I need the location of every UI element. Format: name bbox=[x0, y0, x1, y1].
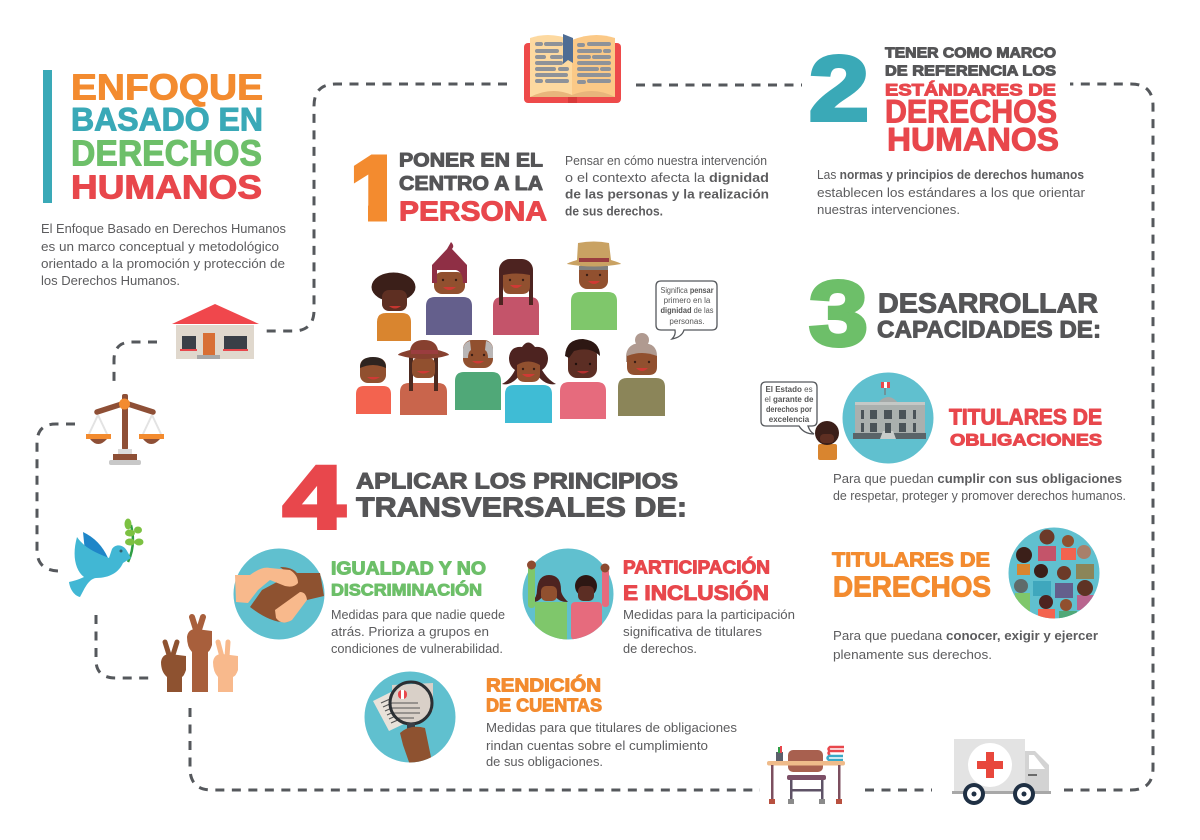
section 2: description: establecen los estándares a los que orientar bbox=[817, 185, 1086, 200]
heading: rendición de cuentas bbox=[486, 674, 602, 716]
section 4: heading bbox=[356, 468, 687, 522]
description: participación e inclusión: significativa de titulares bbox=[623, 624, 763, 639]
description: rendición de cuentas: rindan cuentas sobre el cumplimiento bbox=[486, 738, 708, 753]
section 1: heading bbox=[399, 150, 547, 226]
description: titulares de obligaciones bbox=[833, 471, 1126, 503]
icon: school desk and chair bbox=[767, 746, 845, 804]
description: rendición de cuentas: de sus obligaciones. bbox=[486, 754, 603, 769]
speech bubble: significa pensar bbox=[656, 281, 717, 339]
section 2: heading: TENER COMO MARCO bbox=[885, 44, 1056, 62]
section 3: heading: DESARROLLAR bbox=[878, 288, 1098, 318]
icon: scales of justice bbox=[86, 394, 164, 465]
section 4: heading: APLICAR LOS PRINCIPIOS bbox=[356, 468, 678, 494]
description: titulares de obligaciones: de respetar, proteger y promover derechos humanos. bbox=[833, 488, 1126, 503]
speech bubble: el Estado: excelencia bbox=[769, 415, 810, 424]
title block: ENFOQUE bbox=[71, 66, 263, 108]
person: small orange figure bbox=[815, 421, 839, 460]
speech bubble: significa pensar: dignidad de las bbox=[660, 306, 714, 315]
description: igualdad y no discriminación bbox=[331, 607, 505, 656]
group of people bbox=[356, 242, 665, 423]
title block: HUMANOS bbox=[71, 168, 262, 206]
section 1: description: de las personas y la realización bbox=[565, 186, 769, 202]
person: terracotta shirt with brown hat bbox=[398, 340, 449, 415]
speech bubble: el Estado: El Estado es bbox=[765, 385, 813, 394]
section 2: description: nuestras intervenciones. bbox=[817, 202, 960, 217]
heading: participación e inclusión: PARTICIPACIÓN bbox=[623, 556, 770, 578]
icon: dove with olive branch bbox=[69, 518, 144, 597]
icon: accountability magnifier in circle bbox=[364, 672, 456, 765]
title block: DERECHOS bbox=[71, 132, 262, 174]
description: titulares de obligaciones: Para que puedan cumplir con sus obligaciones bbox=[833, 471, 1122, 486]
icon: government palace in circle bbox=[842, 372, 934, 464]
intro paragraph: orientado a la promoción y protección de bbox=[41, 256, 285, 271]
person: pink shirt dark skin bbox=[560, 339, 606, 419]
section 1: description bbox=[565, 153, 769, 218]
description: rendición de cuentas: Medidas para que titulares de obligaciones bbox=[486, 720, 737, 735]
description: participación e inclusión: de derechos. bbox=[623, 641, 697, 656]
description: igualdad y no discriminación: condiciones de vulnerabilidad. bbox=[331, 641, 503, 656]
heading: titulares de obligaciones bbox=[949, 404, 1102, 450]
section 1: description: o el contexto afecta la dignidad bbox=[565, 170, 769, 185]
person: purple shirt with red hat bbox=[426, 242, 472, 335]
icon: participation in circle bbox=[522, 548, 614, 640]
section 2: description: Las normas y principios de derechos humanos bbox=[817, 167, 1084, 182]
heading: titulares de derechos: DERECHOS bbox=[833, 572, 991, 604]
description: rendición de cuentas bbox=[486, 720, 737, 769]
title block: BASADO EN bbox=[71, 102, 263, 138]
heading: rendición de cuentas: RENDICIÓN bbox=[486, 674, 601, 696]
person: pink shirt with long hair bbox=[493, 259, 539, 335]
icon: raised hands with victory sign bbox=[161, 617, 238, 692]
speech bubble: significa pensar: personas. bbox=[669, 317, 705, 326]
section 4: heading: TRANSVERSALES DE: bbox=[356, 492, 687, 522]
description: titulares de derechos bbox=[833, 628, 1098, 662]
speech bubble: el Estado: derechos por bbox=[766, 405, 812, 414]
title block bbox=[43, 66, 263, 206]
speech bubble: significa pensar: primero en la bbox=[664, 296, 711, 305]
section 4: number: 4 bbox=[283, 447, 346, 547]
speech bubble: el Estado: el garante de bbox=[765, 395, 814, 404]
section 1: heading: CENTRO A LA bbox=[399, 173, 543, 195]
icon: handshake in circle bbox=[234, 548, 324, 640]
heading: rendición de cuentas: DE CUENTAS bbox=[486, 696, 602, 716]
icon: crowd in circle bbox=[1008, 528, 1100, 621]
heading: titulares de derechos: TITULARES DE bbox=[832, 550, 990, 572]
person: blue shirt with curly hair bbox=[502, 342, 556, 423]
description: titulares de derechos: plenamente sus derechos. bbox=[833, 647, 992, 662]
icon: book bbox=[524, 34, 621, 103]
description: igualdad y no discriminación: Medidas para que nadie quede bbox=[331, 607, 505, 622]
description: igualdad y no discriminación: atrás. Prioriza a grupos en bbox=[331, 624, 489, 639]
section 2: heading: ESTÁNDARES DE bbox=[885, 80, 1056, 100]
section 2: number: 2 bbox=[809, 38, 869, 140]
section 2: heading: HUMANOS bbox=[887, 122, 1059, 158]
heading: titulares de obligaciones: TITULARES DE bbox=[949, 404, 1102, 430]
section 1: number: 1 bbox=[352, 140, 400, 237]
speech bubble: el Estado bbox=[761, 382, 817, 434]
heading: igualdad y no discriminación: IGUALDAD Y NO bbox=[331, 558, 486, 578]
icon: ambulance bbox=[952, 739, 1051, 805]
intro paragraph: El Enfoque Basado en Derechos Humanos bbox=[41, 221, 286, 236]
section 3: heading bbox=[877, 288, 1101, 344]
heading: participación e inclusión bbox=[623, 556, 770, 605]
section 2: heading bbox=[885, 44, 1059, 158]
speech bubble: significa pensar: Significa pensar bbox=[660, 286, 714, 295]
heading: igualdad y no discriminación: DISCRIMINACIÓN bbox=[331, 580, 482, 600]
section 1: heading: PERSONA bbox=[399, 196, 547, 226]
section 3: heading: CAPACIDADES DE: bbox=[877, 316, 1101, 344]
section 1: description: Pensar en cómo nuestra intervención bbox=[565, 153, 767, 168]
heading: titulares de obligaciones: OBLIGACIONES bbox=[950, 430, 1102, 450]
person: olive shirt grandmother bbox=[618, 333, 665, 416]
section 1: description: de sus derechos. bbox=[565, 204, 663, 218]
description: participación e inclusión: Medidas para la participación bbox=[623, 607, 795, 622]
intro paragraph bbox=[41, 221, 286, 288]
heading: igualdad y no discriminación bbox=[331, 558, 486, 600]
section 2: description bbox=[817, 167, 1086, 217]
intro paragraph: los Derechos Humanos. bbox=[41, 273, 180, 288]
dashed route connecting the icons bbox=[37, 84, 1153, 790]
section 2: heading: DE REFERENCIA LOS bbox=[885, 62, 1056, 80]
description: titulares de derechos: Para que puedana conocer, exigir y ejercer bbox=[833, 628, 1098, 643]
section 2: heading: DERECHOS bbox=[885, 94, 1057, 130]
person: green shirt with straw hat bbox=[567, 242, 621, 330]
heading: titulares de derechos bbox=[832, 550, 991, 604]
intro paragraph: es un marco conceptual y metodológico bbox=[41, 239, 279, 254]
person: orange shirt with afro bbox=[372, 272, 416, 341]
person: green shirt elder bbox=[455, 340, 501, 410]
heading: participación e inclusión: E INCLUSIÓN bbox=[623, 581, 769, 605]
section 1: heading: PONER EN EL bbox=[399, 150, 543, 172]
description: participación e inclusión bbox=[623, 607, 795, 656]
icon: house bbox=[172, 304, 259, 359]
person: coral shirt boy bbox=[356, 357, 391, 414]
section 3: number: 3 bbox=[809, 263, 868, 365]
